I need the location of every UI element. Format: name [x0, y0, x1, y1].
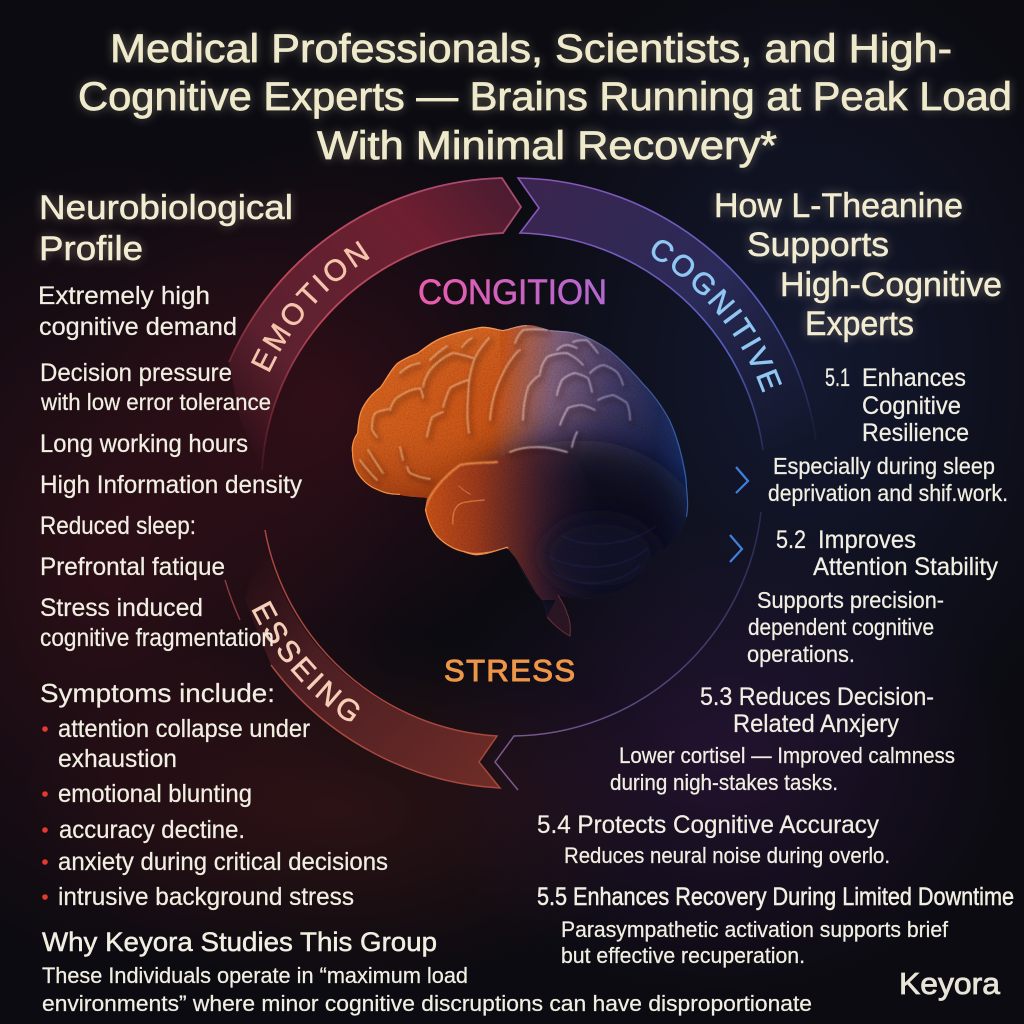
profile list: Decision pressure [40, 359, 232, 387]
cerebellum [534, 526, 648, 584]
heading: how l-theanine supports: Supports [747, 226, 889, 264]
section 5.1 [768, 364, 1008, 506]
section 5.5: but effective recuperation. [561, 943, 805, 968]
section 5.1: Cognitive [862, 392, 961, 420]
label: congition: CONGITION [418, 273, 607, 312]
section 5.2: Supports precision- [757, 587, 944, 613]
arc band: cognitive: COGNITIVE [652, 240, 782, 392]
temporal lobe [426, 448, 580, 600]
title: Cognitive Experts — Brains Running at Peak Load [78, 75, 1012, 119]
heading: symptoms include: Symptoms include: [40, 678, 275, 708]
heading: how l-theanine supports: How L-Theanine [714, 187, 963, 225]
section 5.2: Improves [818, 526, 916, 554]
arc band: esseing: ESSEING [252, 600, 360, 722]
section 5.2: dependent cognitive [748, 614, 934, 640]
title: Medical Professionals, Scientists, and High- [110, 27, 952, 71]
symptom bullet list: exhaustion [58, 745, 177, 773]
symptom bullet list: emotional blunting [58, 780, 252, 808]
brand: keyora: Keyora [899, 966, 1001, 1001]
profile list: Long working hours [40, 430, 248, 458]
heading: neurobiological profile: Profile [39, 230, 143, 268]
symptom bullet list [42, 715, 388, 911]
arc band: emotion: EMOTION [250, 240, 370, 372]
section 5.3: 5.3 Reduces Decision- [700, 683, 934, 711]
body text: why keyora: These Individuals operate in “maximum load [42, 963, 468, 988]
section 5.1: deprivation and shif.work. [768, 480, 1008, 506]
heading: why keyora: Why Keyora Studies This Group [42, 927, 437, 957]
heading: how l-theanine supports [714, 187, 1002, 343]
heading: neurobiological profile [39, 189, 293, 268]
title: With Minimal Recovery* [317, 124, 777, 168]
title [78, 27, 1012, 168]
section 5.4: Reduces neural noise during overlo. [564, 843, 890, 868]
panel: why keyora studies this group [42, 927, 812, 1016]
profile list [38, 282, 302, 652]
section 5.1: Resilience [862, 419, 969, 447]
profile list: High Information density [40, 471, 302, 499]
arc band: cognitive [516, 177, 816, 450]
section 5.5 [537, 883, 1014, 968]
panel: how l-theanine supports [537, 187, 1014, 968]
profile list: Stress induced [40, 594, 203, 622]
section 5.2: operations. [747, 641, 855, 667]
temporal lobe highlights [425, 462, 507, 554]
profile list: Reduced sleep: [40, 512, 196, 540]
rim light [352, 325, 688, 517]
symptom bullet list: accuracy dectine. [59, 816, 245, 844]
profile list: Extremely high [38, 282, 210, 310]
icon: chevron [730, 535, 742, 562]
arc band: emotion [228, 177, 522, 470]
circular stress-cognition cycle diagram [224, 177, 816, 790]
section 5.2 [747, 526, 998, 667]
icon: chevron [736, 467, 748, 493]
arc band: esseing [224, 530, 502, 789]
symptom bullet list: attention collapse under [58, 715, 310, 743]
label: stress: STRESS [444, 653, 575, 688]
heading: neurobiological profile: Neurobiological [39, 189, 293, 227]
profile list: cognitive demand [39, 313, 237, 341]
body text: why keyora [42, 963, 812, 1016]
heading: how l-theanine supports: High-Cognitive [780, 266, 1002, 304]
section 5.2: 5.2 [776, 526, 806, 554]
symptom bullet list: anxiety during critical decisions [58, 848, 388, 876]
section 5.4: 5.4 Protects Cognitive Accuracy [537, 811, 879, 839]
section 5.3: Related Anxjery [733, 710, 899, 738]
panel: neurobiological profile [38, 189, 302, 652]
section 5.3 [610, 683, 955, 795]
brain stem [547, 595, 570, 636]
heading: how l-theanine supports: Experts [805, 305, 914, 343]
symptom bullet list: intrusive background stress [58, 883, 354, 911]
section 5.1: Enhances [862, 364, 966, 392]
panel: symptoms [40, 678, 388, 911]
dark underside shading [455, 440, 705, 650]
section 5.2: Attention Stability [813, 553, 998, 581]
profile list: Prefrontal fatique [40, 553, 225, 581]
section 5.4 [537, 811, 890, 868]
body text: why keyora: environments” where minor cognitive discruptions can have disproportionate [42, 991, 812, 1016]
brain illustration [352, 325, 688, 637]
profile list: with low error tolerance [40, 389, 271, 415]
section 5.3: Lower cortisel — Improved calmness [619, 743, 955, 768]
ring line: right side returning to stress [495, 512, 761, 790]
profile list: cognitive fragmentation [40, 624, 274, 652]
section 5.5: Parasympathetic activation supports brief [561, 917, 949, 942]
section 5.1: 5.1 [825, 364, 850, 392]
section 5.3: during nigh-stakes tasks. [610, 770, 838, 795]
section 5.1: Especially during sleep [773, 453, 995, 479]
